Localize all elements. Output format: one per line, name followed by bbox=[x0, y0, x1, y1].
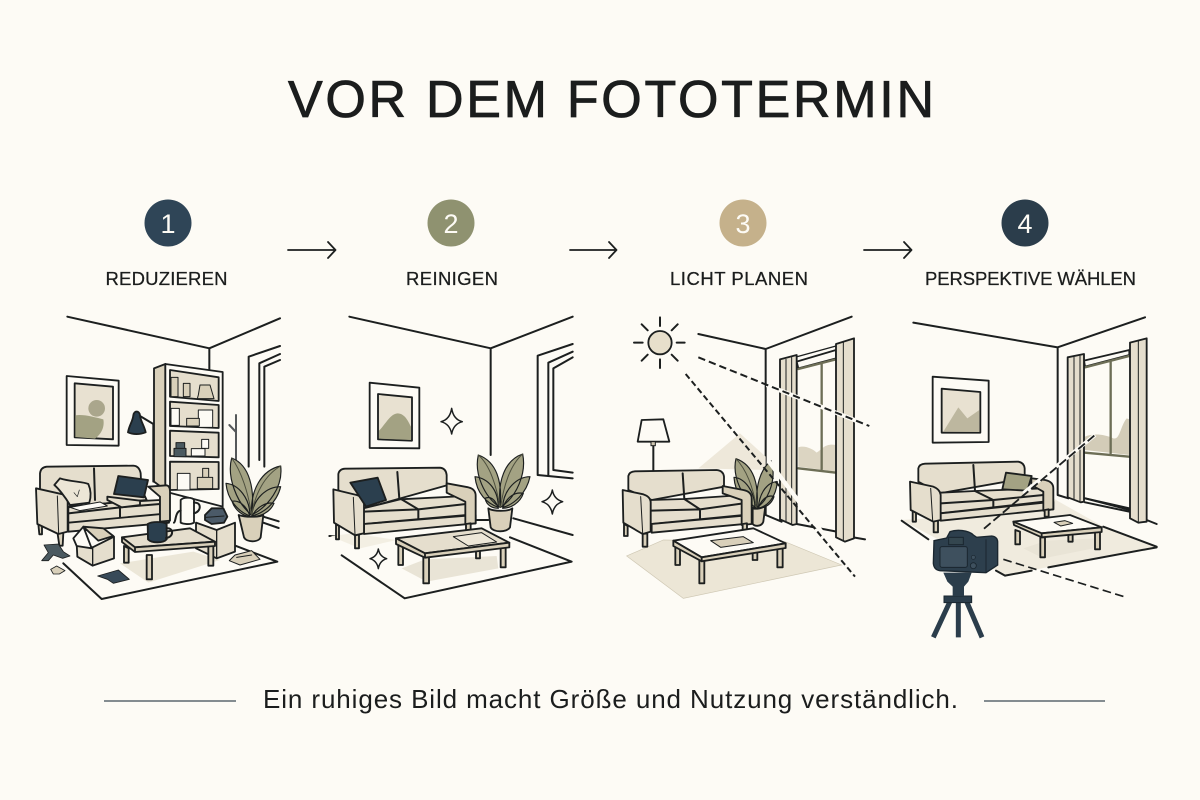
coffee table bbox=[1013, 515, 1102, 558]
sofa bbox=[910, 462, 1053, 532]
step 3 badge: 3 bbox=[735, 209, 751, 239]
arrow 3 to 4 bbox=[864, 242, 912, 258]
panel 1: cluttered room bbox=[36, 317, 281, 599]
table shadow bbox=[402, 556, 498, 582]
room walls and window bbox=[67, 317, 280, 528]
window and curtains bbox=[780, 338, 854, 542]
plant bbox=[226, 458, 281, 541]
panel 3: planned light bbox=[623, 317, 869, 598]
wall light wedge bbox=[698, 433, 766, 470]
footer caption: Ein ruhiges Bild macht Größe und Nutzung verständlich. bbox=[263, 684, 958, 714]
floor lamp bbox=[128, 412, 153, 482]
coat rack bbox=[229, 415, 236, 460]
step 2 badge: 2 bbox=[443, 209, 459, 239]
framed picture bbox=[933, 377, 989, 443]
room walls and window bbox=[329, 317, 573, 536]
step 2 badge bbox=[428, 200, 474, 246]
rug bbox=[627, 540, 842, 598]
footer rule left bbox=[104, 700, 236, 702]
bookshelf bbox=[154, 364, 223, 507]
sun bbox=[634, 317, 685, 368]
sofa bbox=[623, 470, 752, 547]
coffee table bbox=[396, 528, 509, 583]
step 1 badge: 1 bbox=[160, 209, 176, 239]
arrow 2 to 3 bbox=[570, 242, 616, 258]
sight lines (dashed) bbox=[984, 435, 1124, 597]
arrow 1 to 2 bbox=[288, 242, 336, 258]
rug bbox=[342, 537, 572, 598]
step 4 badge: 4 bbox=[1017, 209, 1033, 239]
light rays (dashed) bbox=[686, 357, 869, 577]
floor lamp bbox=[638, 419, 669, 472]
title: VOR DEM FOTOTERMIN bbox=[288, 71, 934, 129]
step 1 label: REDUZIEREN bbox=[106, 268, 228, 289]
floor shadow bbox=[330, 533, 397, 548]
framed picture bbox=[370, 383, 419, 448]
open cardboard box bbox=[73, 527, 114, 566]
panel 4: camera perspective bbox=[902, 317, 1157, 637]
room walls and floor bbox=[913, 317, 1157, 524]
camera on tripod bbox=[933, 530, 998, 637]
step 4 label: PERSPEKTIVE WÄHLEN bbox=[925, 268, 1136, 289]
coffee table bbox=[673, 528, 786, 583]
sofa bbox=[36, 466, 170, 546]
footer rule right bbox=[984, 700, 1105, 702]
framed picture bbox=[67, 376, 119, 446]
sparkles bbox=[370, 408, 563, 569]
navy mug bbox=[148, 522, 172, 542]
sofa bbox=[333, 468, 476, 548]
rug bbox=[63, 545, 277, 599]
panel 2: cleaned room bbox=[329, 317, 573, 598]
step 4 badge bbox=[1002, 200, 1048, 246]
room walls and floor bbox=[698, 317, 865, 539]
plant bbox=[734, 459, 777, 526]
side box with stacked items bbox=[196, 508, 235, 558]
coffee table bbox=[122, 528, 215, 579]
scattered clothes bbox=[42, 544, 260, 583]
step 1 badge bbox=[144, 200, 192, 246]
step 3 badge bbox=[720, 200, 766, 246]
window and curtains bbox=[1068, 338, 1147, 523]
plant bbox=[475, 454, 530, 531]
step 2 label: REINIGEN bbox=[406, 268, 498, 289]
step 3 label: LICHT PLANEN bbox=[670, 268, 808, 289]
rug bbox=[902, 497, 1157, 575]
white mug on floor bbox=[174, 498, 200, 524]
